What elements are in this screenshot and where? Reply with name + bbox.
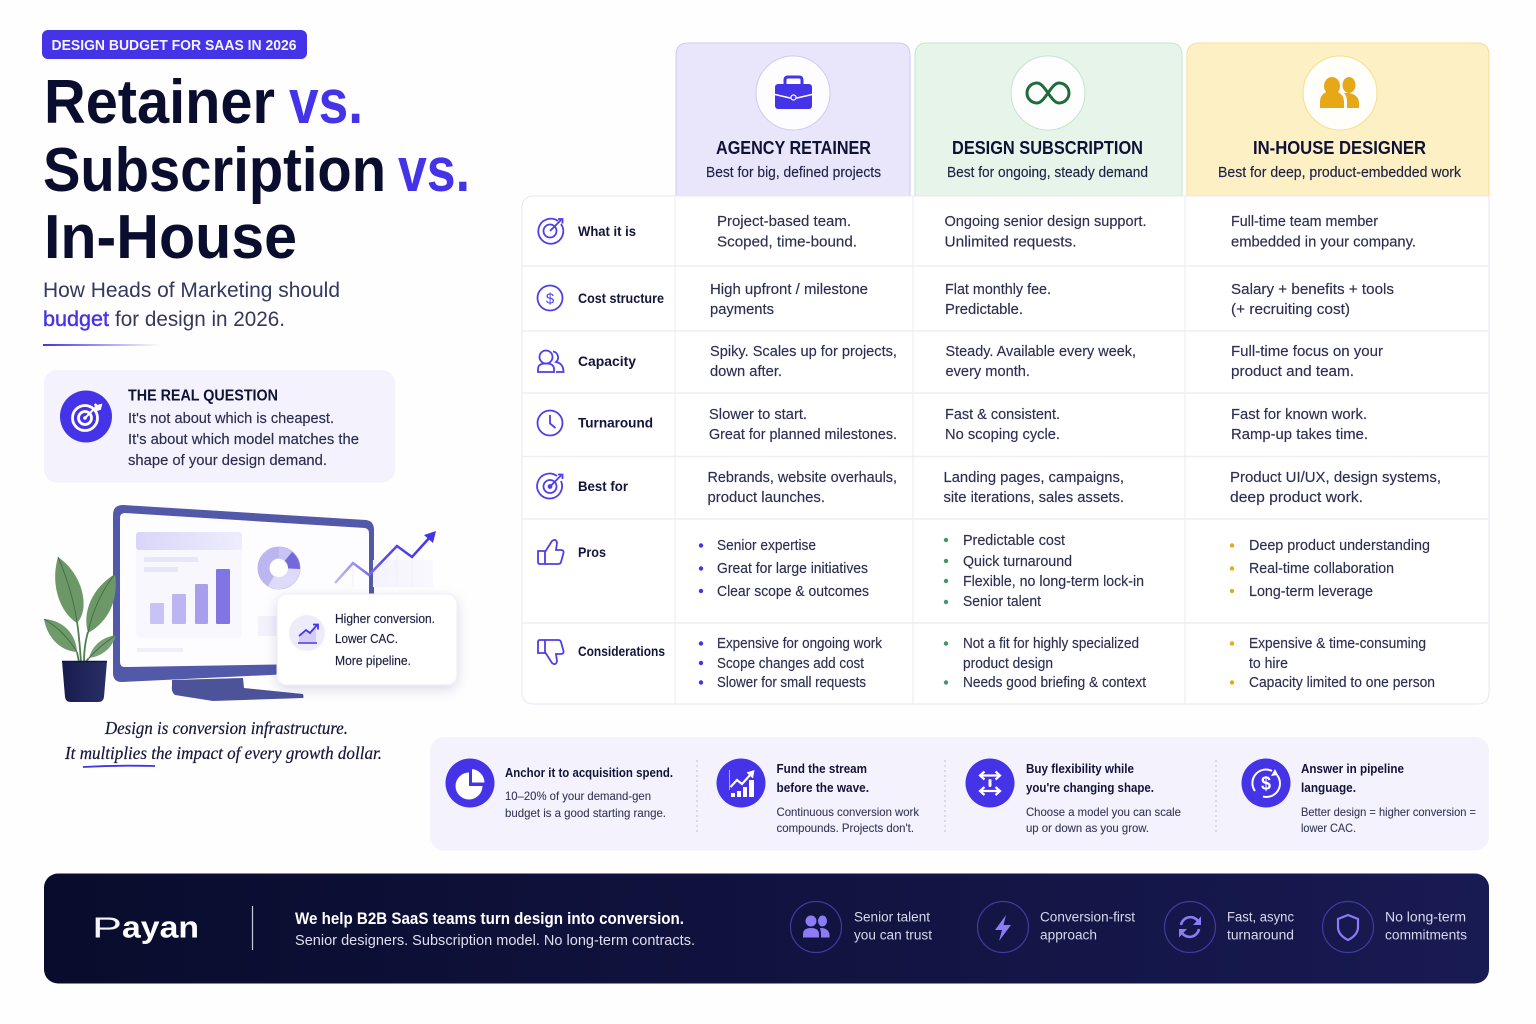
row: cost structure: Flat monthly fee. [945,282,1051,298]
column header: agency retainer: Best for big, defined projects [706,165,881,181]
dashboard panel [136,532,282,652]
row: considerations: Expensive for ongoing work [717,636,883,652]
row: pros: Great for large initiatives [717,561,868,577]
row: best for: product launches. [708,490,825,506]
callout card: More pipeline. [335,654,411,668]
row: what it is: embedded in your company. [1231,234,1416,250]
panel: budgeting guidance strip [430,737,1489,850]
row: pros: Senior expertise [717,538,816,554]
row: considerations: Expensive & time-consuming [1249,636,1426,652]
icon: target arrow [537,474,562,499]
column header: agency retainer [676,43,910,196]
row: what it is: Project-based team. [717,214,851,230]
benefit: conversion-first [978,902,1135,952]
bar chart [150,569,230,624]
tip: buy flexibility: you're changing shape. [1026,780,1154,795]
icon: flexible arrows [966,758,1014,808]
row: pros: Pros [578,544,606,560]
row: what it is: Ongoing senior design support. [944,214,1146,230]
badge: design budget for SaaS in 2026: DESIGN BUDGET FOR SAAS IN 2026 [52,38,296,54]
tip: buy flexibility [966,758,1181,835]
column header: design subscription [915,43,1182,196]
benefit: conversion-first: approach [1040,928,1097,942]
tip: buy flexibility: Buy flexibility while [1026,761,1134,776]
row: considerations: Slower for small requests [717,675,866,691]
tip: answer in pipeline language: Better design = higher conversion = [1301,805,1476,819]
icon: thumbs down [538,640,564,664]
subtitle: budget [43,308,109,331]
donut chart [264,547,300,589]
icon: thumbs up [538,540,564,564]
tip: answer in pipeline language: lower CAC. [1301,821,1356,835]
tip: anchor to acquisition spend: Anchor it to acquisition spend. [505,765,673,780]
icon: dollar: $ [546,290,555,308]
benefit: fast async: Fast, async [1227,910,1294,924]
row: cost structure: Cost structure [578,290,664,306]
bullets: subscription pros [944,538,948,604]
benefit: senior talent [790,902,932,952]
row: what it is: Scoped, time-bound. [717,234,857,250]
tip: fund the stream: before the wave. [776,780,869,795]
title: In-House [44,203,297,272]
row: what it is: Full-time team member [1231,214,1378,230]
illustration: potted plant [44,557,116,702]
tip: fund the stream: compounds. Projects don't. [776,821,914,835]
bullets: in-house pros [1230,543,1234,593]
tip: anchor to acquisition spend [446,758,673,820]
column header: in-house designer: Best for deep, product-embedded work [1218,165,1462,181]
tip: buy flexibility: up or down as you grow. [1026,821,1149,835]
title [43,68,470,272]
row: considerations: Scope changes add cost [717,656,864,672]
bullets: agency pros [699,543,703,593]
title: vs. [398,136,470,205]
logo: Payan: P [92,912,122,944]
banner message [295,910,695,949]
icon: clock [538,410,562,436]
text: the real question: THE REAL QUESTION [128,388,278,404]
text: the real question: shape of your design demand. [128,452,327,469]
benefit: fast async [1164,902,1294,952]
title: vs. [289,68,363,137]
icon: dollar cycle [1242,758,1290,808]
tip: fund the stream: Fund the stream [776,761,867,776]
row: best for: Product UI/UX, design systems, [1230,470,1441,486]
icon: infinity [1011,56,1085,130]
icon: target [538,219,563,244]
row: best for [537,470,1441,506]
row: best for: Rebrands, website overhauls, [708,470,897,486]
row: pros: Senior talent [963,594,1041,610]
row: pros: Clear scope & outcomes [717,584,869,600]
row: considerations [538,636,1435,691]
badge: design budget for SaaS in 2026 [42,30,307,59]
bullets: in-house considerations [1230,641,1234,685]
icon: users [538,350,564,372]
row: capacity [538,344,1383,380]
icon: pie chart [446,758,494,808]
tip: fund the stream: Continuous conversion work [776,805,920,819]
column header: design subscription: DESIGN SUBSCRIPTION [952,138,1143,158]
callout card: Higher conversion. [335,612,435,626]
row: considerations: to hire [1249,656,1288,672]
row: what it is: What it is [578,223,636,239]
row: turnaround: Slower to start. [709,407,807,423]
row: capacity: Capacity [578,353,636,369]
bullets: subscription considerations [944,641,948,685]
bullets: agency considerations [699,641,703,685]
subtitle: for design in 2026. [115,308,285,331]
row: capacity: Steady. Available every week, [946,344,1136,360]
subtitle [43,279,340,346]
title: Retainer [44,68,275,137]
row: turnaround [538,407,1368,443]
callout card [277,594,457,685]
row: turnaround: No scoping cycle. [945,427,1060,443]
row: pros: Predictable cost [963,533,1065,549]
tip: anchor to acquisition spend: budget is a good starting range. [505,806,666,820]
icon: people [1303,56,1377,130]
column header: in-house designer: IN-HOUSE DESIGNER [1253,138,1426,158]
illustration: monitor with dashboard [113,505,457,701]
row: capacity: Full-time focus on your [1231,344,1383,360]
column header: design subscription: Best for ongoing, steady demand [947,165,1148,181]
subtitle: How Heads of Marketing should [43,279,340,302]
row: pros: Quick turnaround [963,554,1072,570]
row: what it is: Unlimited requests. [944,234,1076,250]
row: capacity: product and team. [1231,364,1354,380]
row: considerations: Considerations [578,643,665,659]
handwritten quote: Design is conversion infrastructure. [104,718,348,738]
title: Subscription [43,136,386,205]
benefit: conversion-first: Conversion-first [1040,910,1135,924]
row: cost structure: High upfront / milestone [710,282,868,298]
row: best for: Best for [578,478,629,494]
row: pros: Long-term leverage [1249,584,1373,600]
row: best for: site iterations, sales assets. [944,490,1124,506]
icon: target [60,390,112,442]
row: considerations: Not a fit for highly specialized [963,636,1139,652]
text: the real question: It's not about which is cheapest. [128,410,334,427]
row: considerations: Needs good briefing & context [963,675,1146,691]
tip: answer in pipeline language [1242,758,1476,835]
benefit: senior talent: you can trust [854,928,932,942]
benefit: no long-term commitments [1322,902,1467,952]
row: capacity: Spiky. Scales up for projects, [710,344,897,360]
row: turnaround: Fast for known work. [1231,407,1367,423]
icon: growth chart [716,758,766,808]
row: considerations: product design [963,656,1053,672]
benefit: fast async: turnaround [1227,928,1294,942]
row: turnaround: Fast & consistent. [945,407,1060,423]
row: best for: deep product work. [1230,490,1363,506]
banner message: We help B2B SaaS teams turn design into conversion. [295,910,684,928]
row: what it is [538,214,1416,250]
column header: in-house designer [1187,43,1489,196]
row: best for: Landing pages, campaigns, [944,470,1124,486]
icon: briefcase [756,56,830,130]
tip: anchor to acquisition spend: 10–20% of your demand-gen [505,789,651,803]
row: pros: Deep product understanding [1249,538,1430,554]
text: the real question: It's about which model matches the [128,431,359,448]
row: pros [538,533,1430,610]
callout card: Lower CAC. [335,632,398,646]
row: cost structure: Salary + benefits + tools [1231,282,1394,298]
benefit: senior talent: Senior talent [854,910,930,924]
row: cost structure: (+ recruiting cost) [1231,302,1350,318]
comparison table [522,196,1489,704]
tip: answer in pipeline language: Answer in pipeline [1301,761,1404,776]
banner message: Senior designers. Subscription model. No long-term contracts. [295,933,695,949]
benefit: no long-term commitments: No long-term [1385,910,1466,924]
row: turnaround: Ramp-up takes time. [1231,427,1368,443]
handwritten quote [64,718,382,767]
footer banner [44,874,1489,984]
tip: answer in pipeline language: language. [1301,780,1356,795]
row: cost structure: Predictable. [945,302,1023,318]
row: turnaround: Turnaround [578,414,653,430]
icon: dollar [538,286,562,310]
row: turnaround: Great for planned milestones. [709,427,897,443]
row: capacity: every month. [946,364,1030,380]
logo: Payan: ayan [122,910,199,944]
benefit: no long-term commitments: commitments [1385,928,1467,942]
panel: the real question [44,370,395,482]
logo: Payan [92,910,199,944]
row: considerations: Capacity limited to one person [1249,675,1435,691]
column header: agency retainer: AGENCY RETAINER [716,138,871,158]
row: pros: Flexible, no long-term lock-in [963,574,1144,590]
tip: buy flexibility: Choose a model you can scale [1026,805,1181,819]
growth line chart [335,531,436,587]
row: pros: Real-time collaboration [1249,561,1394,577]
row: cost structure: payments [710,302,774,318]
tip: fund the stream [716,758,920,835]
icon: dollar cycle: $ [1261,774,1271,794]
row: cost structure [538,282,1394,318]
row: capacity: down after. [710,364,782,380]
handwritten quote: It multiplies the impact of every growth dollar. [64,743,382,763]
text: the real question [128,388,359,469]
